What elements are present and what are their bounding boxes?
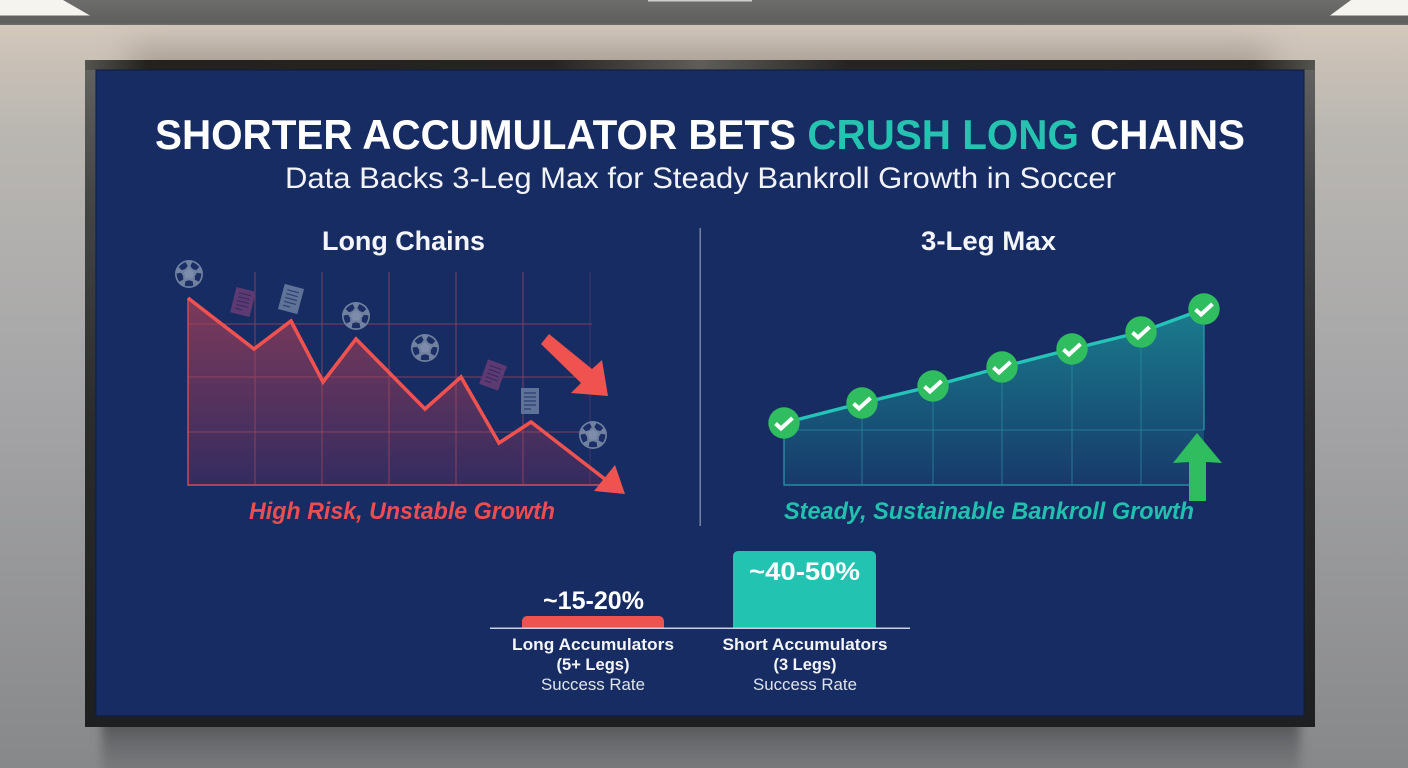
label: long accumulators: [512, 635, 674, 694]
bar: long accumulators: [522, 616, 664, 628]
icon: betting slip: [521, 388, 539, 414]
icon: soccer ball: [579, 421, 607, 449]
label: short accumulators: (3 Legs): [774, 655, 836, 674]
label: short accumulators: Success Rate: [753, 675, 857, 694]
icon: soccer ball: [342, 302, 370, 330]
3-leg max heading: 3-Leg Max: [921, 226, 1056, 256]
label: short accumulators: [722, 635, 888, 694]
center divider: [700, 228, 701, 526]
subtitle: Data Backs 3-Leg Max for Steady Bankroll Growth in Soccer: [285, 162, 1116, 195]
label: long accumulators: (5+ Legs): [556, 655, 630, 674]
label: short accumulators: Short Accumulators: [722, 635, 888, 654]
check markers: [768, 293, 1220, 439]
icon: betting slip: [278, 284, 304, 314]
icon: betting slip: [230, 287, 256, 317]
label: long accumulators: Long Accumulators: [512, 635, 674, 654]
3-leg max caption: Steady, Sustainable Bankroll Growth: [784, 498, 1194, 525]
chart baseline: [490, 628, 910, 629]
declining area chart: [188, 272, 612, 485]
icon: betting slip: [479, 359, 507, 391]
rising area chart: [784, 309, 1204, 485]
arrow: upward growth: [1173, 433, 1222, 501]
bar: short accumulators: [733, 551, 876, 628]
long chains heading: Long Chains: [322, 226, 485, 256]
ceiling with recessed lights: [0, 0, 1408, 25]
display screen panel: [96, 70, 1304, 716]
title: SHORTER ACCUMULATOR BETS CRUSH LONG CHAINS: [155, 111, 1245, 158]
arrow: chart line head: [594, 465, 625, 494]
long chains caption: High Risk, Unstable Growth: [249, 498, 555, 525]
panel: long chains: [175, 226, 625, 525]
icon: soccer ball: [411, 334, 439, 362]
icon: soccer ball: [175, 260, 203, 288]
panel: success rate bar chart: [490, 551, 910, 694]
arrow: downward trend: [541, 334, 608, 396]
panel: 3-leg max: [768, 226, 1222, 525]
label: long accumulators: Success Rate: [541, 675, 645, 694]
display frame: [85, 60, 1315, 727]
value: long accumulators: ~15-20%: [543, 587, 644, 615]
value: short accumulators: ~40-50%: [749, 558, 860, 586]
